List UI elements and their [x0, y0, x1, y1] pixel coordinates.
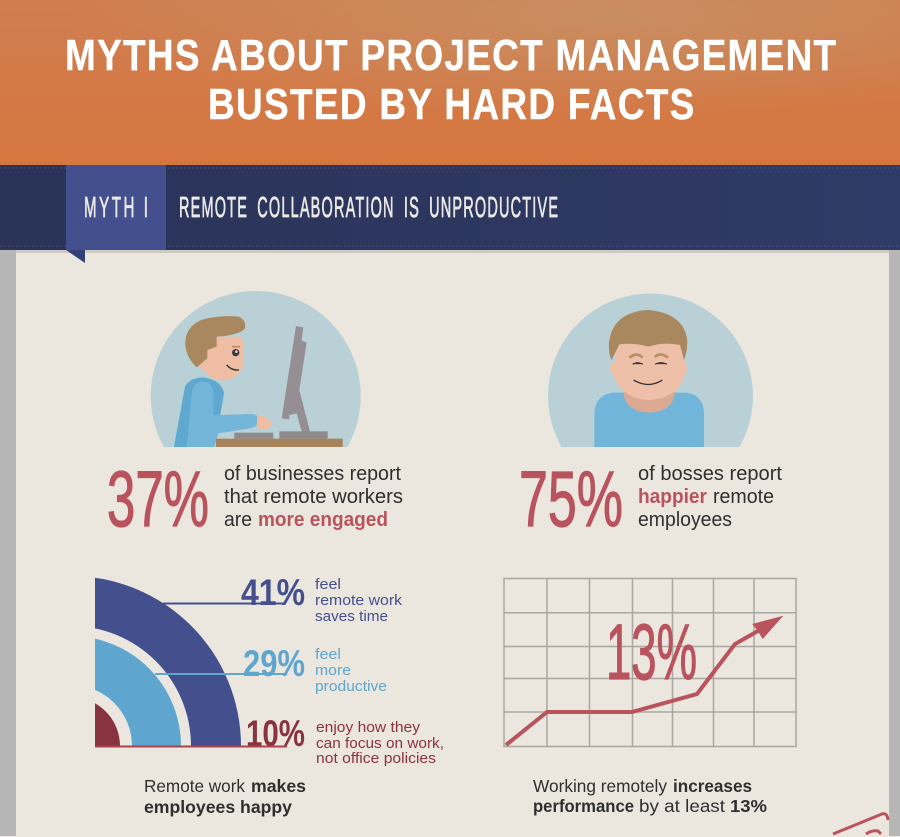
stat: 75% happier: employees — [638, 509, 732, 531]
stat: 75% happier: of bosses report — [638, 463, 782, 485]
label: 41%: feel — [315, 576, 341, 593]
stat: 75% happier: remote — [713, 486, 774, 508]
caption: working remotely increases performance: increases — [673, 776, 752, 796]
caption: working remotely increases performance: 13% — [730, 796, 767, 816]
stat: 37% engaged: are — [224, 509, 252, 531]
value: 13%: 13% — [606, 607, 697, 696]
myth ribbon: MYTH I — [84, 191, 148, 223]
label: 10%: not office policies — [316, 750, 436, 767]
stat: 37% engaged: 37% — [107, 454, 209, 543]
label: 29% — [155, 643, 387, 695]
label: 29%: more — [315, 662, 351, 679]
title — [65, 30, 836, 129]
title: BUSTED BY HARD FACTS — [208, 79, 694, 129]
chart: performance line graph — [504, 578, 796, 746]
label: 29%: 29% — [243, 643, 305, 684]
arrow — [506, 616, 783, 745]
caption: working remotely increases performance: performance — [533, 796, 634, 816]
label: 10% — [95, 713, 444, 767]
caption: working remotely increases performance — [533, 776, 767, 816]
caption: working remotely increases performance: Working remotely — [533, 776, 667, 796]
header banner — [0, 0, 900, 165]
myth banner — [0, 165, 900, 263]
icon: man at computer — [150, 291, 361, 447]
label: 10%: 10% — [246, 713, 305, 754]
caption: remote work makes employees happy: Remote work — [144, 776, 245, 796]
stat: 75% happier: 75% — [519, 454, 623, 543]
myth ribbon — [66, 165, 166, 263]
caption: remote work makes employees happy — [144, 776, 306, 817]
stat: 37% engaged: more engaged — [258, 509, 388, 531]
label: 41%: 41% — [241, 572, 305, 613]
title: MYTHS ABOUT PROJECT MANAGEMENT — [65, 30, 836, 80]
chart: concentric arcs — [95, 578, 443, 766]
stat: 37% engaged: that remote workers — [224, 486, 403, 508]
stat: 37% engaged: of businesses report — [224, 463, 401, 485]
label: 41% — [163, 572, 403, 625]
caption: remote work makes employees happy: makes — [251, 776, 306, 796]
label: 41%: remote work — [315, 592, 403, 609]
stat: 75% happier — [519, 454, 782, 543]
stat: 37% engaged — [107, 454, 403, 543]
stat: 75% happier: happier — [638, 486, 707, 508]
caption: working remotely increases performance: by at least — [639, 796, 725, 816]
icon: smiling man — [548, 294, 753, 447]
label: 10%: can focus on work, — [316, 735, 444, 752]
stamp corner — [833, 814, 888, 834]
label: 10%: enjoy how they — [316, 719, 421, 736]
label: 41%: saves time — [315, 608, 388, 625]
myth statement: REMOTE COLLABORATION IS UNPRODUCTIVE — [179, 190, 558, 223]
label: 29%: productive — [315, 678, 387, 695]
label: 29%: feel — [315, 646, 341, 663]
caption: remote work makes employees happy: employees happy — [144, 797, 292, 817]
